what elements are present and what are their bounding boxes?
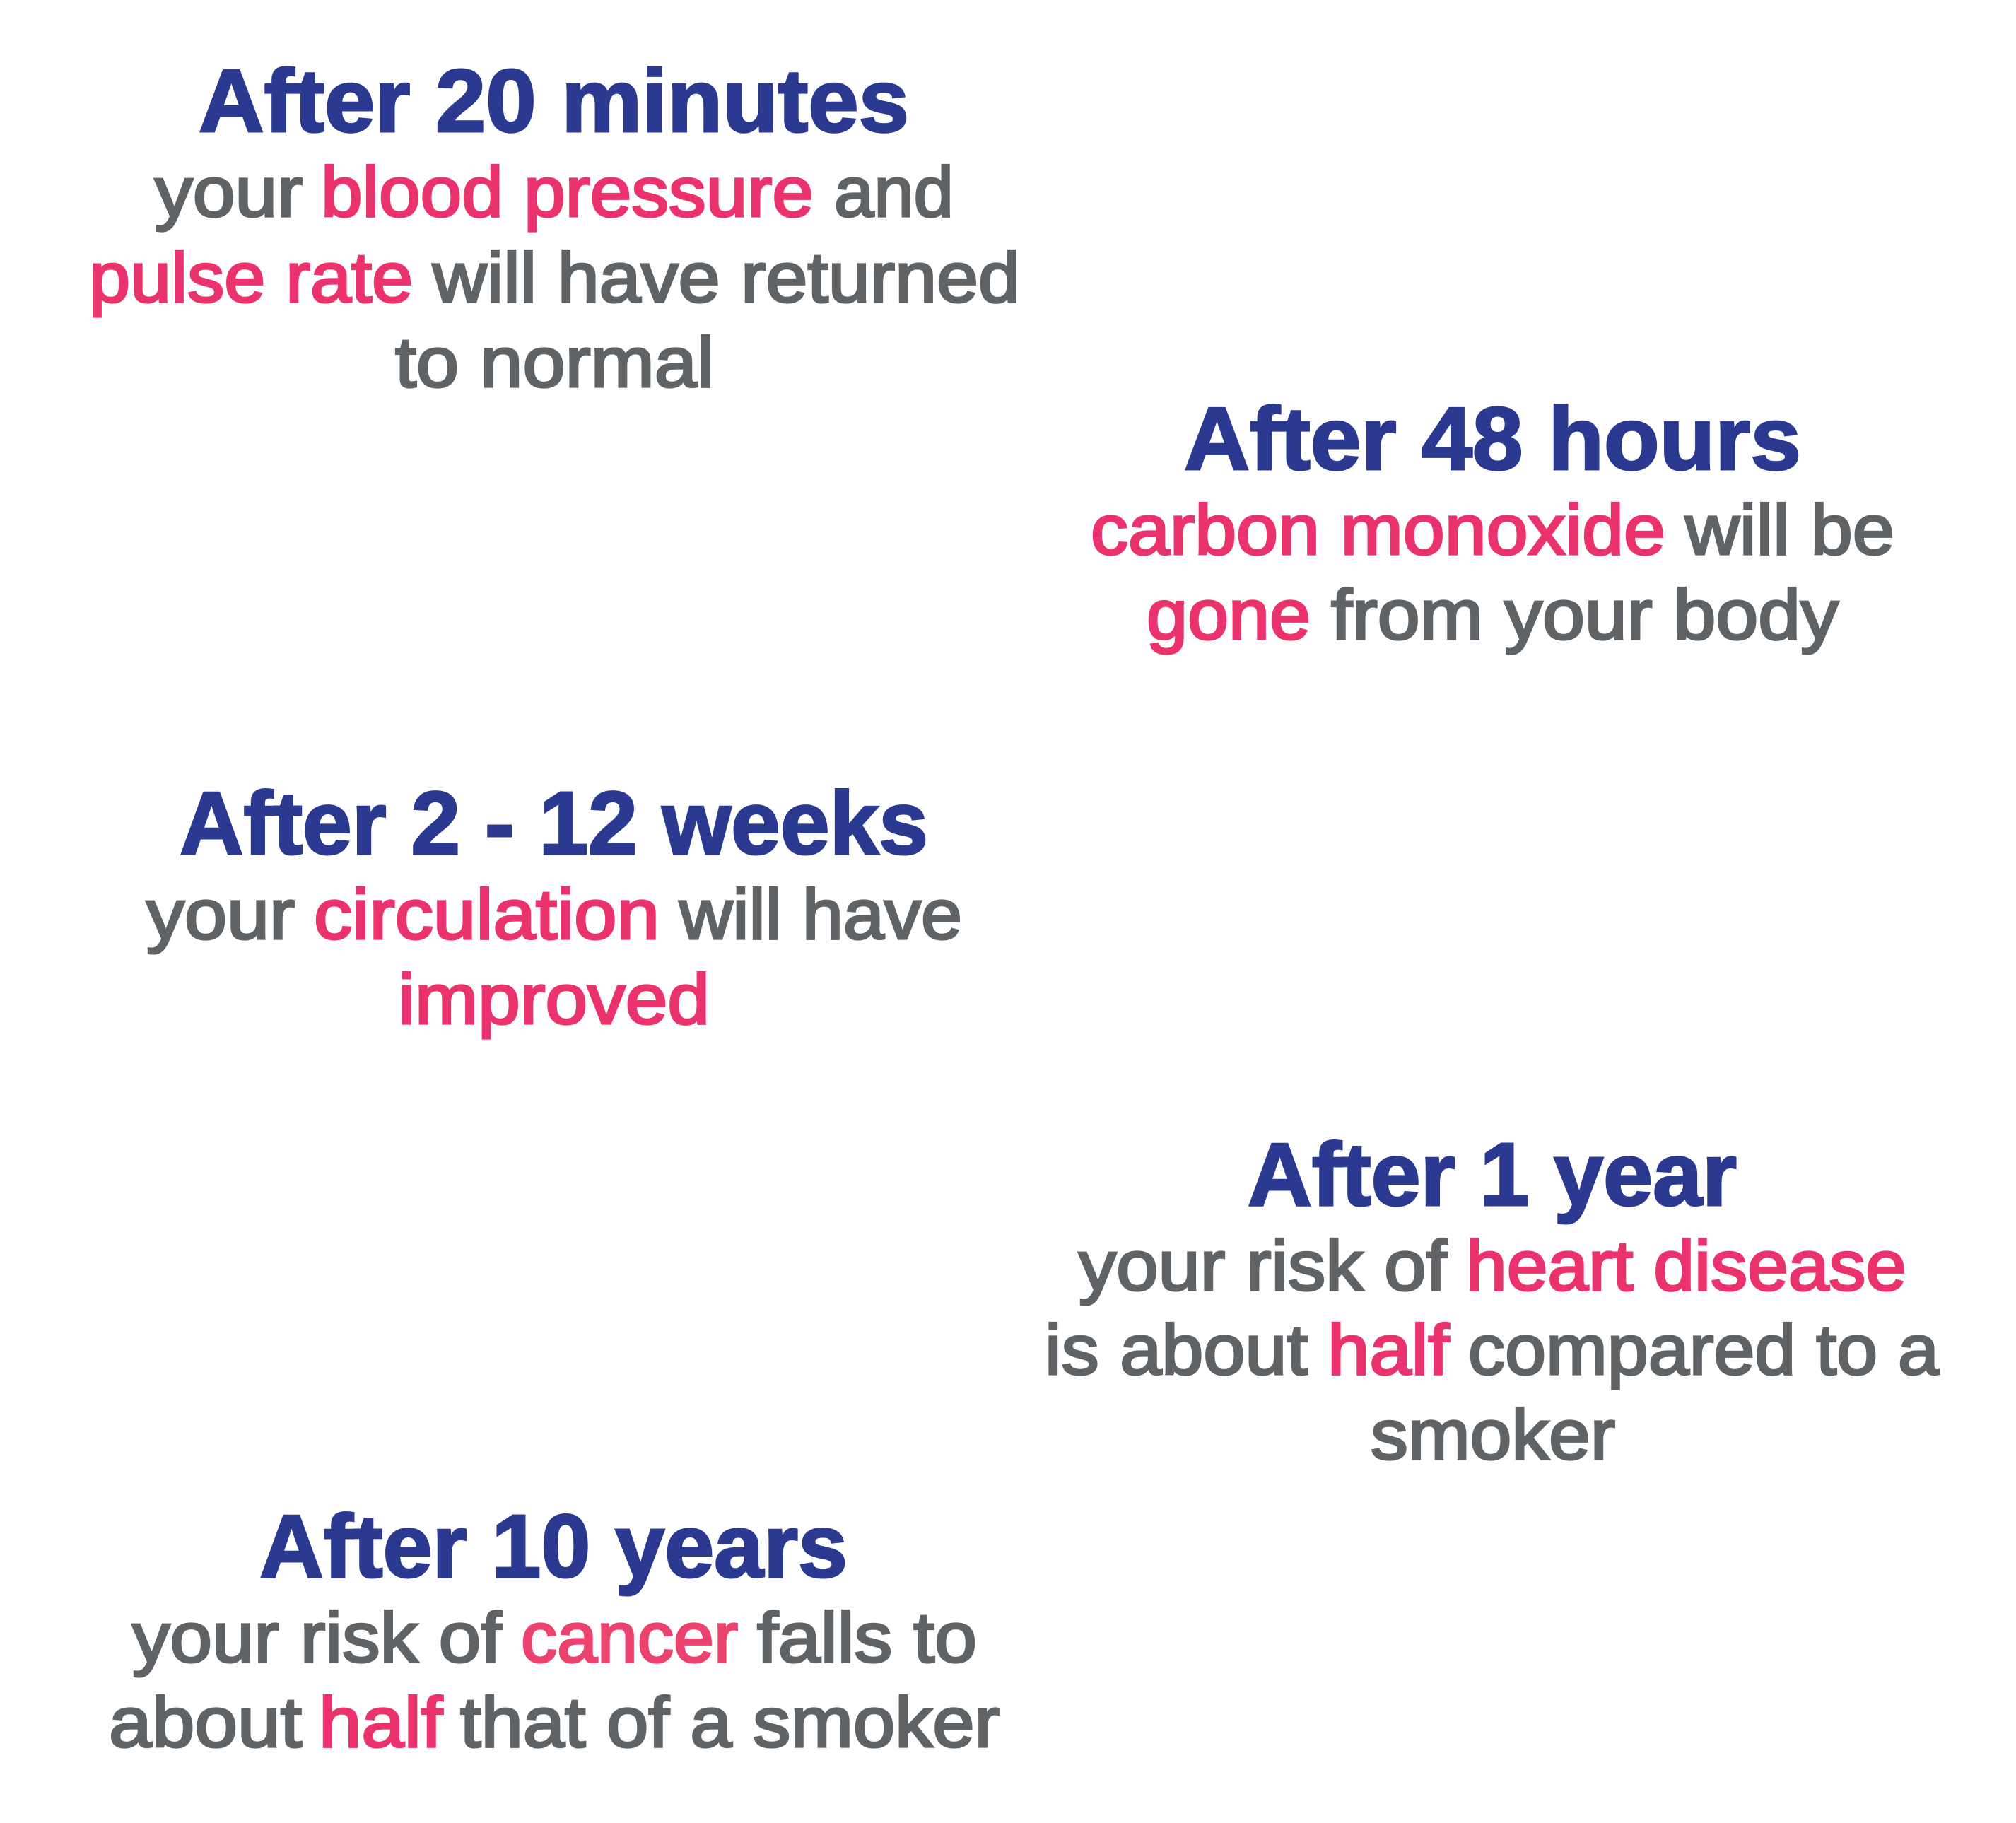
text block: blood pressure and pulse rate: your	[155, 153, 303, 232]
panel: after 10 years	[109, 1496, 1000, 1762]
text block: risk of cancer: falls to	[757, 1598, 977, 1677]
panel: after 20 minutes	[89, 51, 1020, 402]
text block: carbon monoxide gone	[1091, 491, 1894, 655]
panel: after 48 hours	[1091, 389, 1894, 655]
heading: after 1 year: After 1 year	[1248, 1125, 1737, 1224]
heading: after 20 minutes: After 20 minutes	[199, 51, 909, 151]
text block: risk of cancer	[109, 1598, 1000, 1762]
text block: risk of heart disease	[1045, 1226, 1939, 1475]
text block: blood pressure and pulse rate: pulse rate	[89, 238, 413, 317]
text block: circulation improved	[146, 875, 962, 1039]
panel: after 2 - 12 weeks	[146, 773, 962, 1039]
text block: carbon monoxide gone: gone	[1147, 575, 1311, 655]
text block: circulation improved: will have	[679, 875, 962, 954]
text block: risk of cancer: cancer	[521, 1598, 738, 1677]
text block: circulation improved: circulation	[314, 875, 660, 954]
text block: blood pressure and pulse rate: and	[834, 153, 954, 232]
heading: after 2 - 12 weeks: After 2 - 12 weeks	[180, 773, 928, 873]
text block: blood pressure and pulse rate: to normal	[395, 323, 714, 402]
text block: risk of cancer: your risk of	[132, 1598, 502, 1677]
heading: after 10 years: After 10 years	[259, 1496, 848, 1596]
text block: circulation improved: improved	[398, 960, 710, 1039]
text block: carbon monoxide gone: carbon monoxide	[1091, 491, 1665, 570]
text block: risk of heart disease: your risk of	[1079, 1226, 1447, 1306]
text block: risk of cancer: about	[109, 1683, 302, 1762]
text block: risk of heart disease: half	[1328, 1311, 1449, 1390]
text block: risk of heart disease: heart disease	[1466, 1226, 1906, 1306]
text block: risk of heart disease: smoker	[1371, 1395, 1615, 1475]
text block: risk of heart disease: compared to a	[1468, 1311, 1939, 1390]
text block: risk of heart disease: is about	[1045, 1311, 1308, 1390]
text block: carbon monoxide gone: from your body	[1331, 575, 1839, 655]
panel: after 1 year	[1045, 1125, 1939, 1475]
text block: risk of cancer: half	[319, 1683, 443, 1762]
text block: circulation improved: your	[146, 875, 295, 954]
text block: blood pressure and pulse rate: will have returned	[432, 238, 1020, 317]
heading: after 48 hours: After 48 hours	[1184, 389, 1801, 488]
text block: blood pressure and pulse rate: blood pressure	[321, 153, 814, 232]
text block: carbon monoxide gone: will be	[1684, 491, 1894, 570]
text block: risk of cancer: that of a smoker	[460, 1683, 1000, 1762]
text block: blood pressure and pulse rate	[89, 153, 1020, 402]
